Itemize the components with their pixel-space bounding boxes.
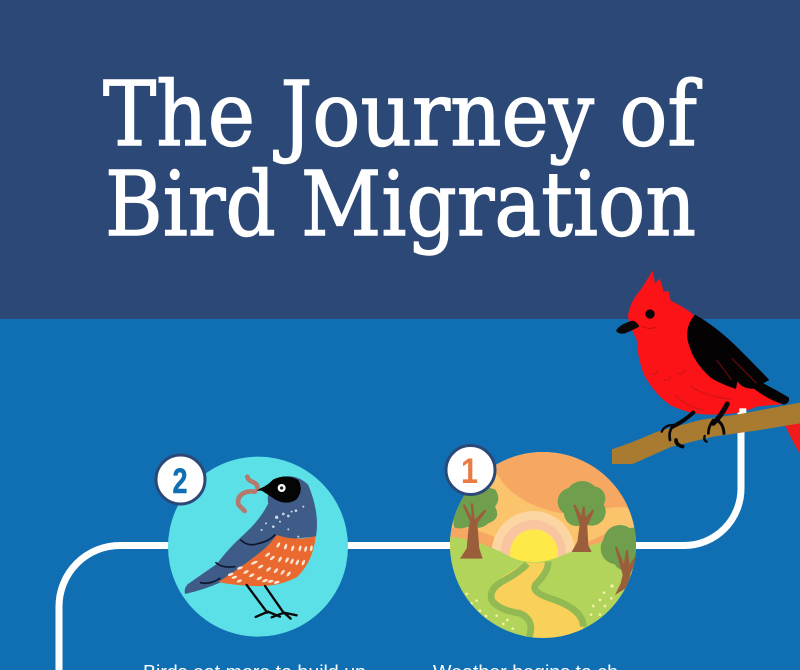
step 2 badge: 2 (172, 462, 188, 501)
step 1 badge: 1 (461, 452, 478, 491)
tree far right (600, 525, 636, 595)
robin body (185, 476, 317, 594)
wing feather accents (717, 358, 757, 383)
branch (612, 403, 800, 464)
sky (447, 450, 640, 550)
beak (616, 321, 639, 334)
tail (785, 423, 800, 454)
belly markings (227, 542, 313, 584)
hill (447, 533, 640, 640)
cardinal on branch (612, 271, 800, 464)
step 1: sunrise landscape illustration (450, 452, 636, 638)
title (103, 62, 702, 256)
robin wing lines (201, 535, 275, 583)
title: The Journey of (103, 62, 702, 166)
cardinal wing (687, 315, 789, 405)
robin legs (247, 585, 297, 619)
migration route line (59, 400, 741, 670)
mouth line (642, 326, 656, 328)
step 2: robin illustration (168, 457, 348, 637)
worm (238, 477, 257, 511)
eye (645, 309, 655, 319)
step 2 badge (156, 455, 205, 504)
robin eye (278, 484, 286, 492)
robin belly (218, 535, 316, 586)
winding road (490, 563, 583, 640)
tree left (454, 483, 498, 559)
title: Bird Migration (105, 152, 696, 256)
flowers (465, 584, 614, 630)
back speckles (261, 506, 304, 538)
chest feather marks (650, 369, 732, 410)
header band (0, 0, 800, 319)
legs and claws (662, 404, 727, 447)
cardinal body (628, 271, 785, 415)
tree right (558, 481, 606, 552)
robin head (253, 476, 301, 503)
sun (492, 511, 574, 562)
route line showing above branch (739, 408, 746, 413)
step 1 badge (446, 446, 495, 494)
